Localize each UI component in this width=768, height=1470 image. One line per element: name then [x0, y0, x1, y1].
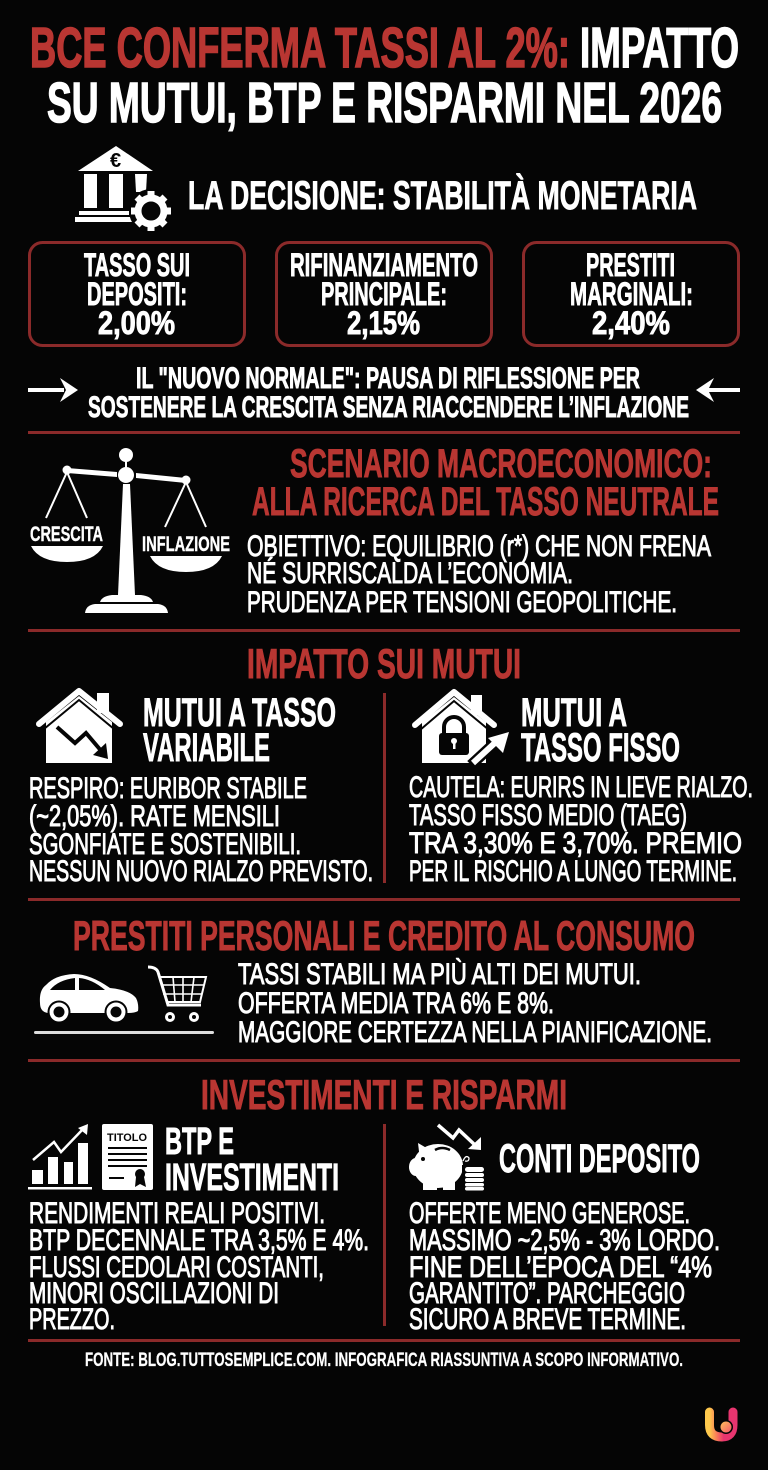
heading: scenario macroeconomico: [252, 442, 719, 524]
panel: prestiti marginali: PRESTITI: [586, 247, 675, 283]
panel: tasso sui depositi: TASSO SUI: [84, 247, 190, 283]
text block: btp: PREZZO.: [29, 1303, 115, 1336]
label: crescita: CRESCITA: [30, 523, 103, 546]
panel: prestiti marginali: 2,40%: [592, 305, 670, 341]
icon: bond document: TITOLO: [107, 1132, 147, 1144]
text block: btp: [29, 1197, 369, 1336]
arrow: right pointing left: [696, 378, 740, 402]
text block: btp: RENDIMENTI REALI POSITIVI.: [29, 1197, 325, 1230]
icon: logo: [710, 1412, 733, 1437]
icon: balance scale: [30, 448, 230, 613]
heading: mutui a tasso variabile: MUTUI A TASSO: [143, 691, 336, 735]
panel: prestiti marginali: MARGINALI:: [570, 276, 693, 312]
panel: rifinanziamento principale: 2,15%: [347, 305, 420, 341]
heading: mutui a tasso variabile: [143, 691, 336, 770]
text block: prestiti: OFFERTA MEDIA TRA 6% E 8%.: [238, 987, 554, 1020]
text block: btp: FLUSSI CEDOLARI COSTANTI,: [29, 1251, 324, 1284]
heading: investimenti e risparmi: INVESTIMENTI E RISPARMI: [201, 1071, 567, 1118]
icon: bank with gear: €: [110, 150, 121, 172]
panel: rifinanziamento principale: PRINCIPALE:: [321, 276, 447, 312]
icon: bond document: [102, 1124, 153, 1190]
heading: mutui a tasso fisso: [521, 691, 680, 770]
panel: tasso sui depositi: 2,00%: [98, 305, 175, 341]
arrow: left pointing right: [28, 378, 78, 402]
icon: house with falling arrow: [39, 691, 120, 763]
panel: tasso sui depositi: DEPOSITI:: [87, 276, 187, 312]
text block: tasso variabile: (~2,05%). RATE MENSILI: [29, 800, 280, 833]
panel: tasso sui depositi: [30, 242, 244, 346]
panel: rifinanziamento principale: [276, 242, 492, 346]
icon: house with lock and rising arrow: [415, 692, 509, 765]
title: [30, 16, 739, 135]
heading: impatto sui mutui: IMPATTO SUI MUTUI: [247, 640, 521, 687]
heading: mutui a tasso variabile: VARIABILE: [143, 726, 270, 770]
panel: rifinanziamento principale: RIFINANZIAMENTO: [290, 247, 478, 283]
text block: tasso fisso: [409, 771, 753, 888]
text block: obiettivo: NÉ SURRISCALDA L’ECONOMIA.: [247, 557, 573, 590]
icon: bank with gear: [75, 146, 173, 233]
text block: tasso variabile: SGONFIATE E SOSTENIBILI.: [29, 828, 301, 861]
text block: obiettivo: [247, 530, 711, 619]
text block: nuovo normale: [88, 362, 689, 424]
text block: prestiti: [238, 958, 712, 1049]
icon: shopping cart: [148, 967, 206, 1020]
heading: btp e investimenti: [165, 1121, 339, 1199]
label: inflazione: INFLAZIONE: [142, 533, 230, 556]
heading: btp e investimenti: INVESTIMENTI: [165, 1157, 339, 1199]
text block: btp: BTP DECENNALE TRA 3,5% E 4%.: [29, 1224, 369, 1257]
text block: conti deposito: [409, 1197, 720, 1336]
heading: btp e investimenti: BTP E: [165, 1121, 234, 1163]
icon: car: [40, 974, 138, 1022]
text block: tasso variabile: NESSUN NUOVO RIALZO PREVISTO.: [29, 855, 373, 888]
icon: piggy bank with coins: [409, 1125, 486, 1192]
text block: tasso variabile: RESPIRO: EURIBOR STABILE: [29, 772, 307, 805]
text block: tasso variabile: [29, 772, 373, 888]
heading: mutui a tasso fisso: MUTUI A: [521, 691, 627, 735]
panel: prestiti marginali: [524, 242, 738, 346]
text block: btp: MINORI OSCILLAZIONI DI: [29, 1277, 279, 1310]
icon: rising bar chart: [28, 1124, 92, 1190]
